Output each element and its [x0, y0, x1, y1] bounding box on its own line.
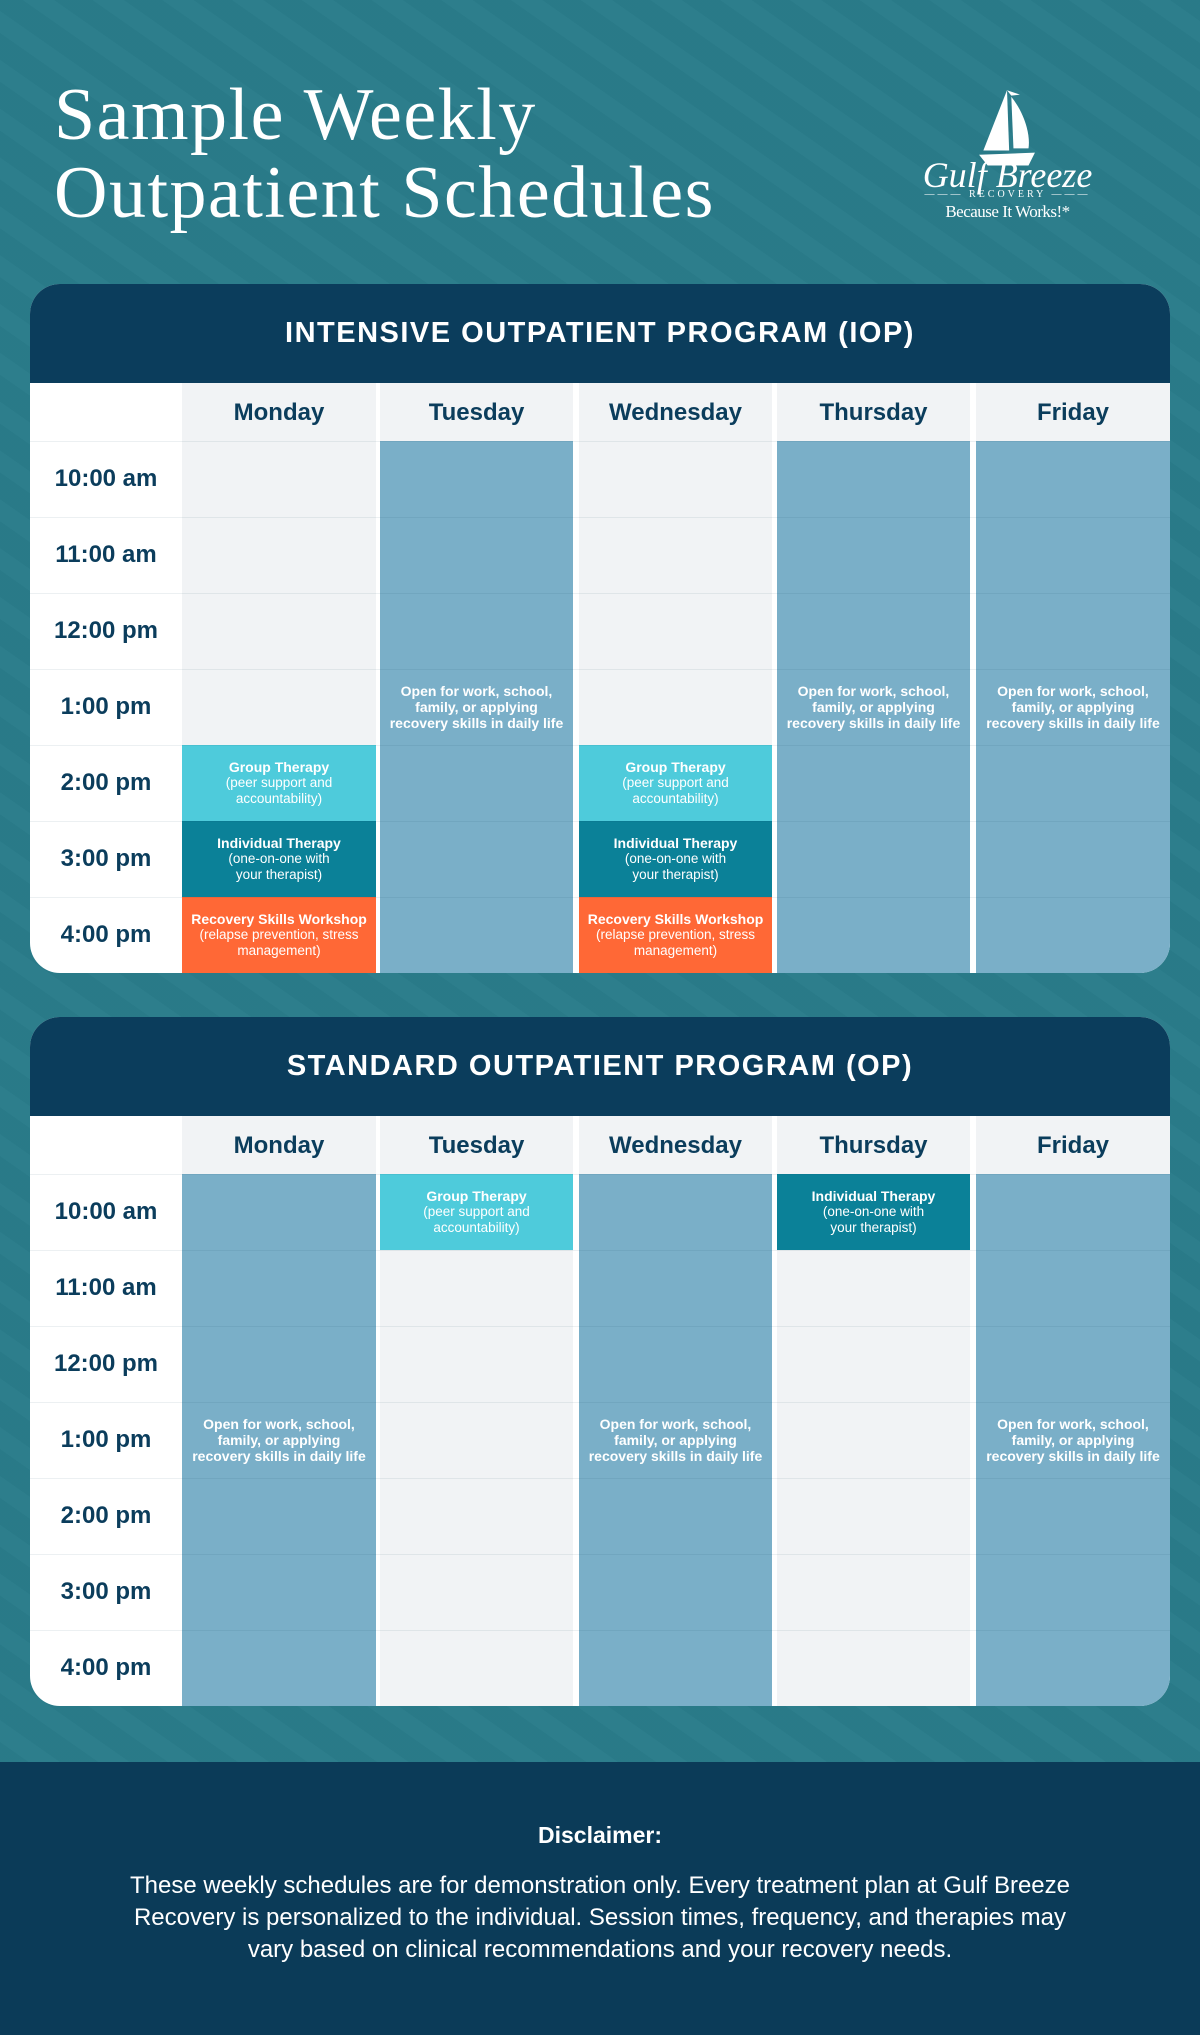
column: wednesday: recovery skills in daily life: [589, 1448, 762, 1464]
column: wednesday: Open for work, school,: [600, 1416, 751, 1432]
column: wednesday: (relapse prevention, stress: [596, 927, 755, 942]
logo: ——— RECOVERY ———: [925, 189, 1090, 200]
logo: Because It Works!*: [945, 202, 1070, 221]
column: monday: accountability): [236, 791, 322, 806]
panel: IOP: Wednesday: [609, 399, 742, 426]
column: friday: recovery skills in daily life: [986, 1448, 1160, 1464]
column: monday: (one-on-one with: [228, 851, 330, 866]
column: monday: Group Therapy: [229, 759, 329, 775]
column: tuesday: accountability): [433, 1220, 520, 1235]
column: monday: management): [237, 943, 321, 958]
time labels: 12:00 pm: [54, 1350, 158, 1377]
panel: IOP: [30, 284, 1170, 973]
panel: OP: Thursday: [819, 1132, 928, 1159]
column: thursday: Individual Therapy: [812, 1188, 935, 1204]
time labels: 4:00 pm: [61, 1654, 151, 1681]
column: monday: your therapist): [236, 867, 322, 882]
heading IOP: INTENSIVE OUTPATIENT PROGRAM (IOP): [285, 317, 915, 349]
title: Sample Weekly: [54, 74, 537, 156]
panel: IOP: Thursday: [819, 399, 928, 426]
title: Outpatient Schedules: [54, 152, 715, 234]
logo: [923, 90, 1092, 221]
panel: IOP: Monday: [234, 399, 324, 426]
time labels: 10:00 am: [55, 1198, 157, 1225]
column: friday: [976, 441, 1170, 973]
time labels: 4:00 pm: [61, 921, 151, 948]
column: monday: [182, 1174, 376, 1706]
time labels: 1:00 pm: [61, 1426, 151, 1453]
column: wednesday: management): [634, 943, 717, 958]
column: friday: family, or applying: [1012, 1432, 1134, 1448]
column: friday: family, or applying: [1012, 699, 1134, 715]
column: tuesday: recovery skills in daily life: [390, 715, 563, 731]
column: monday: family, or applying: [218, 1432, 340, 1448]
panel: OP: Tuesday: [429, 1132, 524, 1159]
time labels: 12:00 pm: [54, 617, 158, 644]
column: thursday: [777, 1174, 970, 1706]
column: tuesday: family, or applying: [415, 699, 538, 715]
column: thursday: Open for work, school,: [798, 683, 949, 699]
column: wednesday: accountability): [632, 791, 719, 806]
time labels: 10:00 am: [55, 465, 157, 492]
panel: OP: Friday: [1037, 1132, 1109, 1159]
column: monday: Open for work, school,: [203, 1416, 355, 1432]
panel: OP: Monday: [234, 1132, 324, 1159]
column: monday: (peer support and: [226, 775, 332, 790]
time labels: 2:00 pm: [61, 769, 151, 796]
disclaimer text: These weekly schedules are for demonstration only. Every treatment plan at Gulf Breeze Recovery is personalized to the individual. Session times, frequency, and therapies may vary based on clinical recommendations and your recovery needs.: [130, 1872, 1070, 1963]
time labels: [54, 1198, 158, 1681]
column: tuesday: Group Therapy: [426, 1188, 527, 1204]
column: friday: recovery skills in daily life: [986, 715, 1160, 731]
column: friday: Open for work, school,: [997, 1416, 1149, 1432]
heading OP: [30, 1017, 1170, 1116]
heading OP: STANDARD OUTPATIENT PROGRAM (OP): [287, 1050, 913, 1082]
column: thursday: [777, 441, 970, 973]
footer disclaimer: [0, 1762, 1200, 2035]
column: tuesday: (peer support and: [423, 1204, 530, 1219]
panel: IOP: Friday: [1037, 399, 1109, 426]
title: [54, 74, 715, 234]
column: wednesday: Individual Therapy: [614, 835, 737, 851]
time labels: 2:00 pm: [61, 1502, 151, 1529]
column: wednesday: Group Therapy: [625, 759, 726, 775]
column: monday: Recovery Skills Workshop: [191, 911, 367, 927]
column: thursday: (one-on-one with: [823, 1204, 924, 1219]
panel: IOP: Tuesday: [429, 399, 524, 426]
column: wednesday: (peer support and: [622, 775, 729, 790]
column: tuesday: [380, 1174, 573, 1706]
panel: OP: [30, 1017, 1170, 1706]
time labels: 11:00 am: [55, 1274, 157, 1301]
time labels: 3:00 pm: [61, 1578, 151, 1605]
column: monday: Individual Therapy: [217, 835, 341, 851]
column: thursday: your therapist): [830, 1220, 917, 1235]
time labels: 11:00 am: [55, 541, 157, 568]
column: monday: recovery skills in daily life: [192, 1448, 366, 1464]
time labels: 1:00 pm: [61, 693, 151, 720]
heading IOP: [30, 284, 1170, 383]
column: friday: [976, 1174, 1170, 1706]
column: friday: Open for work, school,: [997, 683, 1149, 699]
panel: OP: Wednesday: [609, 1132, 742, 1159]
column: tuesday: Open for work, school,: [401, 683, 552, 699]
column: wednesday: your therapist): [632, 867, 719, 882]
logo: Gulf Breeze: [923, 155, 1092, 195]
column: monday: (relapse prevention, stress: [199, 927, 359, 942]
column: thursday: family, or applying: [812, 699, 935, 715]
time labels: 3:00 pm: [61, 845, 151, 872]
column: wednesday: [579, 441, 772, 973]
column: wednesday: (one-on-one with: [625, 851, 726, 866]
column: monday: [182, 441, 376, 973]
time labels: [54, 465, 158, 948]
column: wednesday: [579, 1174, 772, 1706]
column: wednesday: family, or applying: [614, 1432, 737, 1448]
column: thursday: recovery skills in daily life: [787, 715, 960, 731]
column: tuesday: [380, 441, 573, 973]
disclaimer heading: Disclaimer:: [538, 1822, 662, 1848]
column: wednesday: Recovery Skills Workshop: [588, 911, 763, 927]
